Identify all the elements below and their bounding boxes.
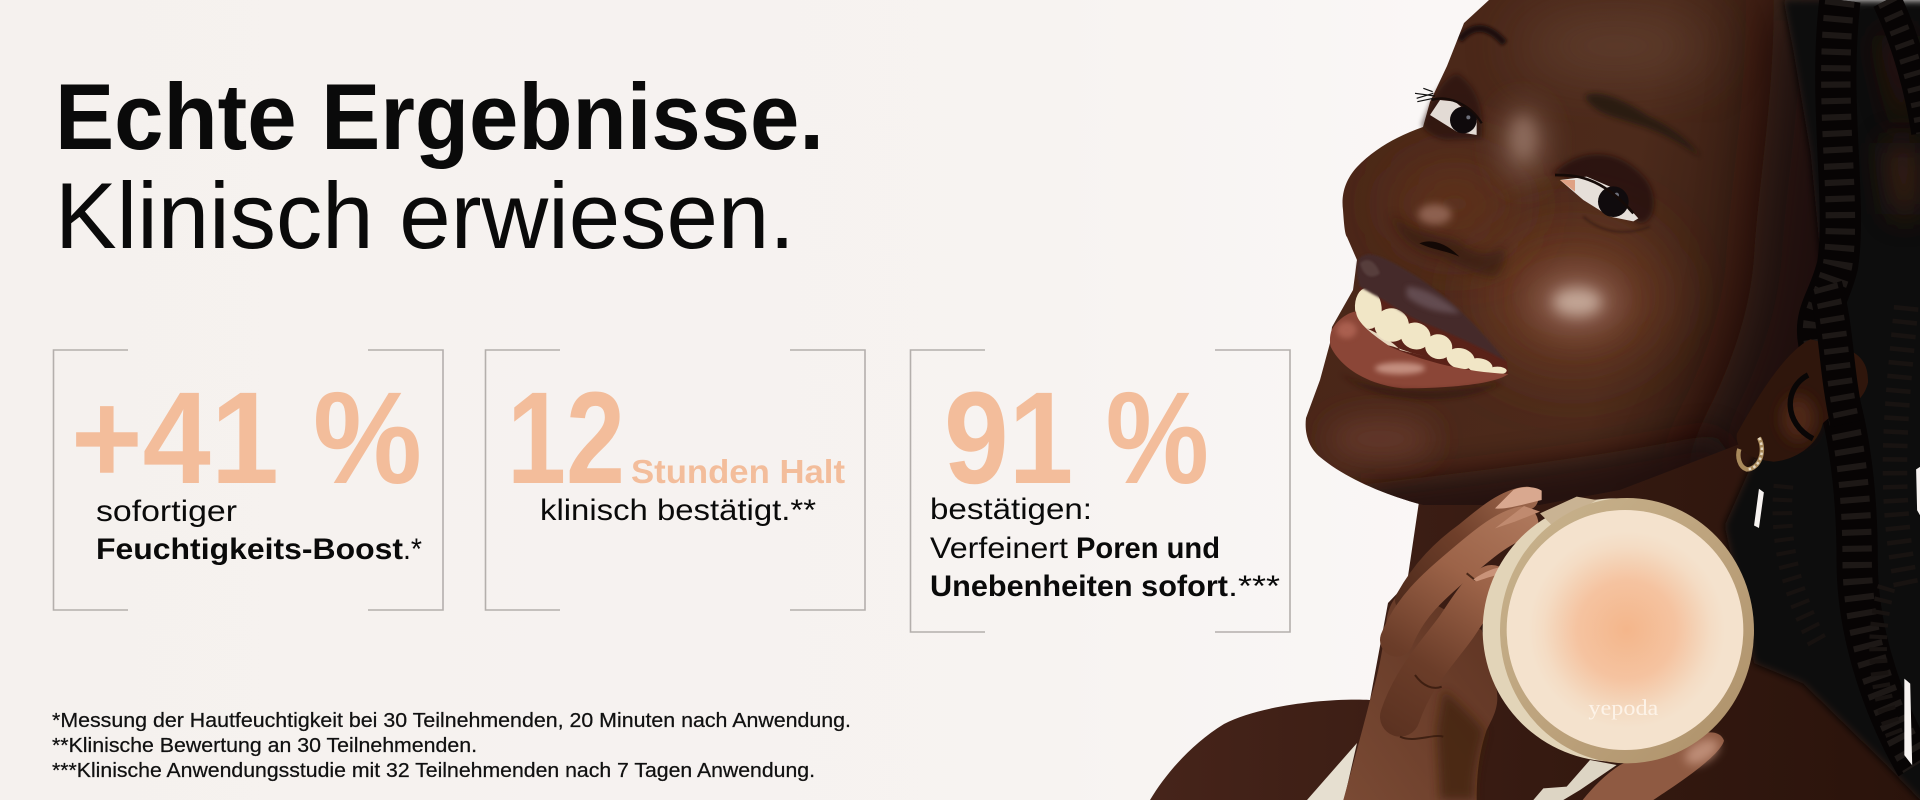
panel: 12 Stunden Halt bbox=[486, 350, 865, 610]
compact rim bbox=[1500, 498, 1754, 763]
ear bbox=[1737, 286, 1868, 462]
title bbox=[55, 64, 824, 268]
hand bbox=[1343, 487, 1542, 800]
icon: hoop earring bbox=[1738, 438, 1762, 469]
text: bestätigen, Poren und Unebenheiten: .*** bbox=[1228, 570, 1280, 603]
text: sofortiger Feuchtigkeits-Boost: sofortiger bbox=[96, 495, 237, 528]
wrist shadow bbox=[1437, 690, 1485, 800]
footnotes: *Messung der Hautfeuchtigkeit bei 30 Teilnehmenden, 20 Minuten nach Anwendung. bbox=[52, 709, 851, 732]
finger back bbox=[1407, 498, 1527, 600]
logo: yepoda bbox=[1588, 695, 1658, 720]
mouth interior bbox=[1355, 287, 1508, 375]
strap right and thumb bbox=[1533, 732, 1724, 800]
panel: +41 % moisture boost bbox=[54, 350, 443, 610]
text: bestätigen, Poren und Unebenheiten bbox=[930, 493, 1280, 603]
footnotes bbox=[52, 709, 851, 782]
eye left bbox=[1415, 73, 1482, 140]
stat: 91 %: 91 % bbox=[944, 364, 1209, 511]
eye right bbox=[1553, 154, 1654, 232]
face bbox=[1306, 0, 1840, 505]
compact lid bbox=[1507, 510, 1743, 750]
title: Echte Ergebnisse. bbox=[55, 64, 824, 169]
facial features bbox=[1330, 73, 1700, 399]
stat unit: Stunden Halt: Stunden Halt bbox=[631, 454, 845, 491]
finger middle bbox=[1397, 523, 1522, 640]
lower teeth bbox=[1360, 325, 1427, 357]
finger front bbox=[1400, 585, 1492, 717]
footnotes: ***Klinische Anwendungsstudie mit 32 Teilnehmenden nach 7 Tagen Anwendung. bbox=[52, 759, 815, 782]
palm bbox=[1343, 583, 1497, 800]
nose bbox=[1392, 213, 1505, 277]
lower lip bbox=[1330, 312, 1508, 399]
stat: 12: 12 bbox=[507, 364, 625, 511]
compact bbox=[1483, 497, 1754, 763]
footnotes: **Klinische Bewertung an 30 Teilnehmenden. bbox=[52, 734, 477, 757]
panel: 91 % confirm bbox=[910, 350, 1290, 632]
strap left bbox=[1307, 743, 1357, 800]
title: Klinisch erwiesen. bbox=[55, 163, 795, 268]
compact base bbox=[1483, 498, 1747, 762]
hair bbox=[1725, 0, 1920, 800]
upper lip bbox=[1357, 254, 1507, 362]
photo: smiling model holding compact bbox=[1150, 0, 1920, 800]
text: sofortiger Feuchtigkeits-Boost: Feuchtigkeits-Boost bbox=[96, 533, 403, 566]
text: sofortiger Feuchtigkeits-Boost bbox=[96, 495, 422, 566]
text: sofortiger Feuchtigkeits-Boost: .* bbox=[403, 533, 422, 566]
text: bestätigen, Poren und Unebenheiten: Verfeinert bbox=[930, 532, 1069, 565]
stat: +41 %: +41 % bbox=[71, 364, 422, 511]
text: bestätigen, Poren und Unebenheiten: bestätigen: bbox=[930, 493, 1092, 526]
text: bestätigen, Poren und Unebenheiten: Poren und bbox=[1076, 532, 1220, 565]
shoulder and neck bbox=[1150, 380, 1920, 800]
text: klinisch bestätigt: klinisch bestätigt.** bbox=[540, 494, 816, 527]
brow bbox=[1585, 93, 1700, 157]
thumb bbox=[1583, 732, 1724, 800]
upper teeth bbox=[1353, 287, 1507, 376]
nails bbox=[1495, 487, 1542, 509]
skin shading bbox=[1330, 4, 1819, 505]
text: bestätigen, Poren und Unebenheiten: Unebenheiten sofort bbox=[930, 570, 1228, 603]
